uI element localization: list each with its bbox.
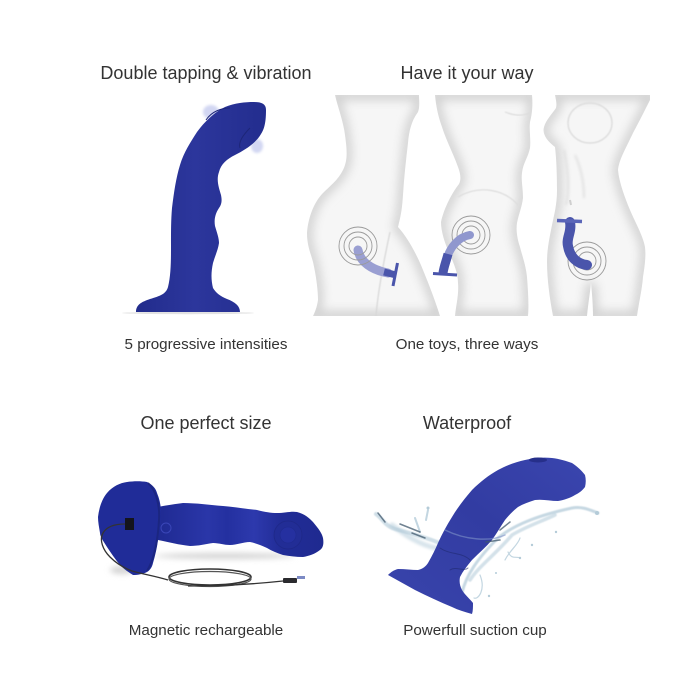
figure: side view — [307, 95, 440, 316]
water droplets — [426, 506, 599, 597]
product on figure three — [557, 220, 606, 280]
product: lying with charging cable — [98, 481, 323, 586]
product: water splash — [376, 458, 599, 614]
heading: size: One perfect size — [140, 413, 272, 433]
figure: torso view — [544, 95, 650, 316]
caption: three ways: One toys, three ways — [396, 336, 539, 353]
product: upright with vibration marks — [122, 102, 266, 314]
product on figure two — [433, 216, 490, 275]
figures panel — [307, 95, 650, 316]
figure: front view — [435, 95, 532, 316]
heading: waterproof: Waterproof — [423, 413, 512, 433]
caption: suction: Powerfull suction cup — [403, 622, 547, 639]
product on figure one — [339, 227, 398, 286]
splash over product — [378, 513, 510, 570]
caption: intensities: 5 progressive intensities — [125, 336, 288, 353]
caption: magnetic: Magnetic rechargeable — [129, 622, 283, 639]
splash behind product — [376, 507, 598, 598]
heading: double tapping: Double tapping & vibration — [100, 63, 312, 83]
heading: have it your way: Have it your way — [400, 63, 534, 83]
